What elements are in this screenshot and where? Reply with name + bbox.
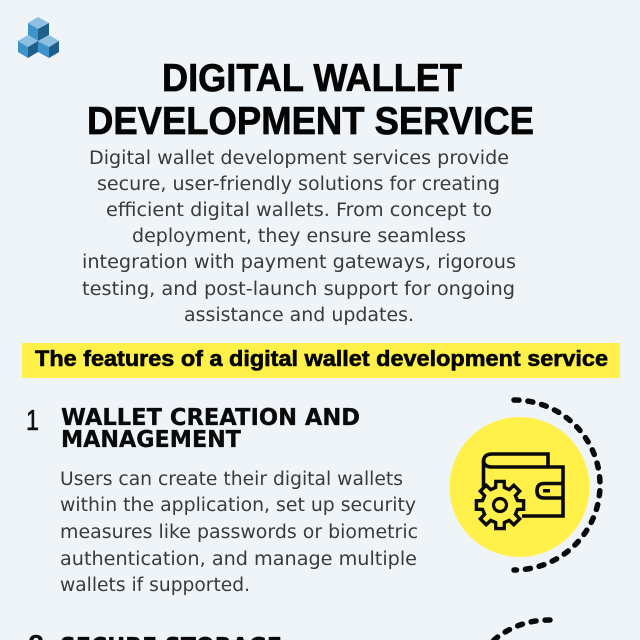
feature 1 description: within the application, set up security [60,495,416,516]
feature 1 heading: WALLET CREATION AND [61,405,360,431]
intro text block: secure, user-friendly solutions for creating [97,174,500,195]
feature 1 number: 1 [26,405,39,437]
title [87,57,534,143]
feature 1 description: measures like passwords or biometric [60,522,418,543]
intro text block: Digital wallet development services provide [89,148,509,169]
intro text block: assistance and updates. [184,305,414,326]
section banner: The features of a digital wallet development service [35,346,608,371]
intro text block: integration with payment gateways, rigorous [82,252,516,273]
intro text block: testing, and post-launch support for ongoing [82,279,515,300]
icon: feature 1 yellow circle with wallet and gear [450,417,590,557]
intro text block: efficient digital wallets. From concept to [106,200,492,221]
feature 1 description: authentication, and manage multiple [60,549,417,570]
title: DEVELOPMENT SERVICE [87,100,534,143]
feature 1 description [60,469,418,596]
feature 1 description: wallets if supported. [60,575,250,596]
title: DIGITAL WALLET [162,57,462,100]
dashed arc: feature 1 [514,400,600,570]
dashed arc: feature 2 [480,620,550,640]
feature 1 heading: MANAGEMENT [61,427,241,453]
feature 1 heading [61,405,360,453]
intro text block: deployment, they ensure seamless [132,226,466,247]
icon: gear [476,481,524,529]
intro text block [82,148,516,326]
icon: logo cubes [18,17,59,58]
feature 1 description: Users can create their digital wallets [60,469,403,490]
section banner [22,343,620,378]
